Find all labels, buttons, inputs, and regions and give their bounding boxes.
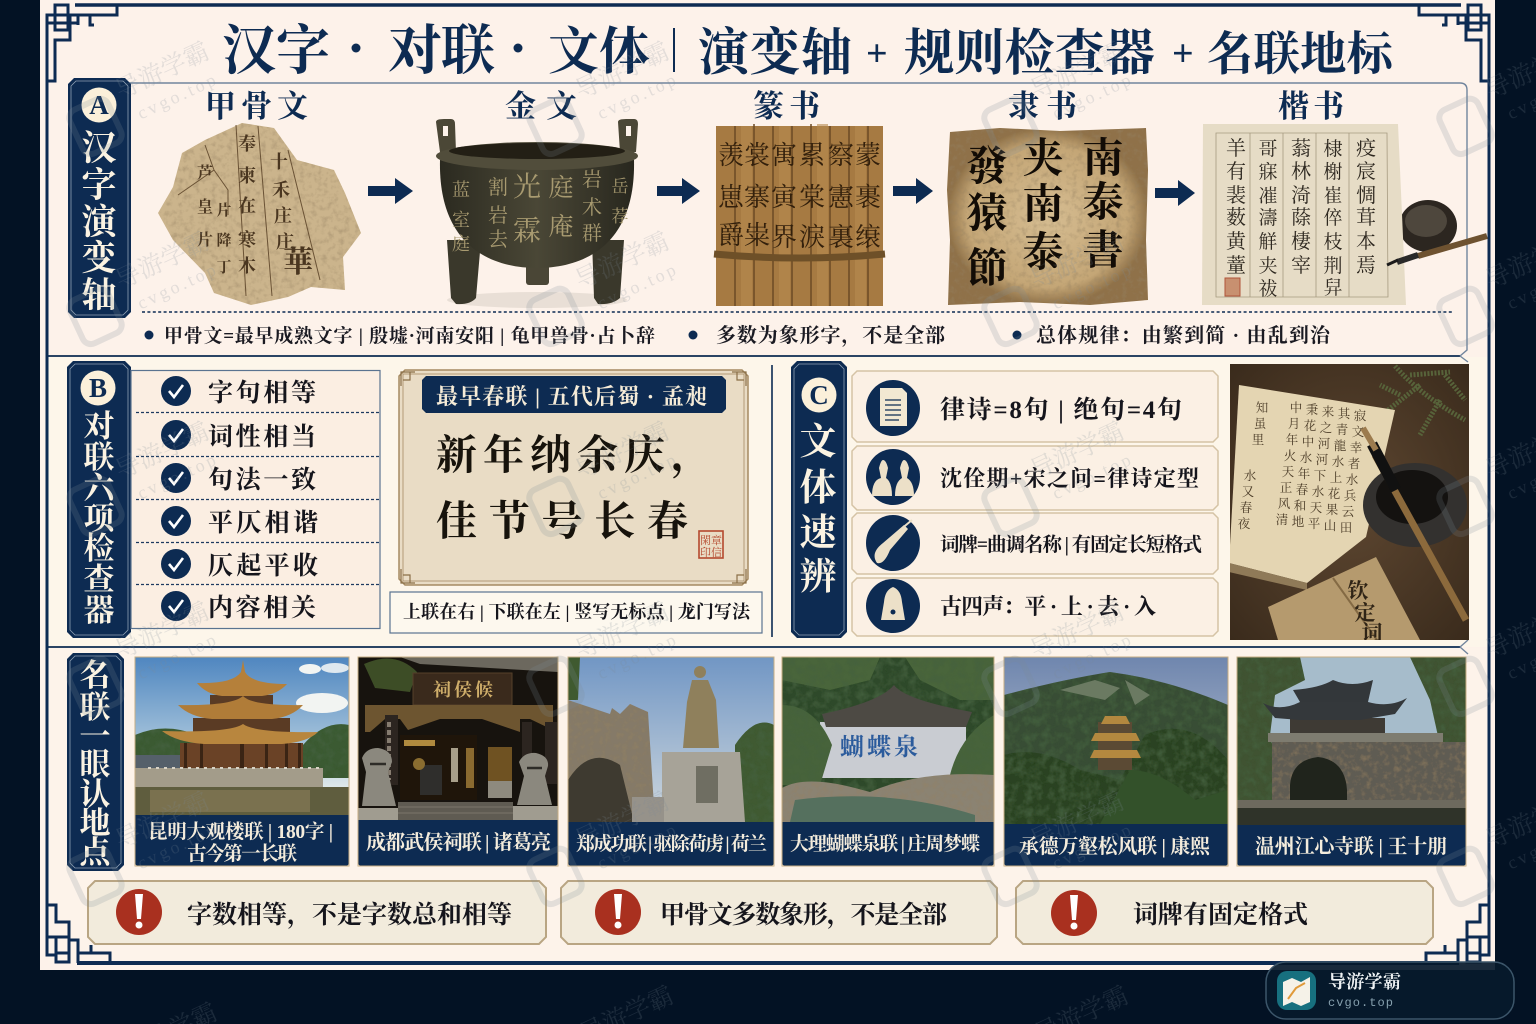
checklist: 词性相当: [208, 422, 316, 451]
image: bamboo slips: 累棠淚: [799, 141, 825, 252]
row: 沈宋: 沈佺期+宋之问=律诗定型: [940, 466, 1199, 491]
image: regular script paper: 哥寐凗濤觧夹祓: [1258, 138, 1278, 300]
checklist: 仄起平收: [208, 552, 318, 580]
image: bamboo slips: 寓寅界: [771, 141, 799, 252]
watermarks: cvgo.top: [1049, 820, 1134, 873]
photo: book and inkstone: 中月年火天正风清: [1276, 400, 1302, 527]
photo: book and inkstone: 来之河河下水天平: [1308, 404, 1335, 531]
stage headings: [205, 89, 1345, 124]
couplet card: [399, 370, 748, 585]
card: 温州江心寺: 温州江心寺联 | 王十朋: [1255, 835, 1447, 858]
stage headings: 隶书: [1008, 89, 1078, 124]
panel: landmark couplets: [67, 653, 1466, 871]
key points line: [144, 324, 1332, 347]
photo: book and inkstone: 钦定词: [1348, 579, 1382, 645]
card: 成都武侯祠: 成都武侯祠联 | 诸葛亮: [366, 830, 551, 854]
label: B 对联六项检查器: 对联六项检查器: [84, 409, 118, 628]
stage headings: 篆书: [753, 89, 821, 124]
brand badge: 导游学霸: [1328, 972, 1401, 992]
watermarks: 导游学霸: [111, 227, 214, 295]
warning 2: [561, 881, 997, 944]
brand badge: cvgo.top: [1328, 996, 1393, 1010]
title: 名联地标: [1207, 29, 1396, 81]
image: bronze ding: 蓝室庭: [452, 180, 470, 254]
title: +: [1172, 33, 1194, 75]
image: regular script paper: [1202, 124, 1487, 305]
image: regular script paper: 疫宸惆茸本焉: [1356, 137, 1376, 277]
key points line: 甲骨文=最早成熟文字 | 殷墟·河南安阳 | 龟甲兽骨·占卜辞: [164, 324, 655, 347]
image: oracle bone: 十禾庄庄: [270, 152, 294, 252]
row: 词牌: 词牌=曲调名称 | 有固定长短格式: [940, 534, 1202, 556]
card: 昆明大观楼: [135, 657, 349, 866]
image: bamboo slips: 羡崽爵: [718, 141, 745, 250]
checklist: 内容相关: [208, 593, 316, 622]
card: 昆明大观楼: 昆明大观楼联 | 180字 |: [148, 821, 333, 843]
card: 承德万壑松风: [1004, 657, 1228, 866]
title: +: [866, 33, 888, 75]
arrow: [893, 178, 933, 204]
image: regular script paper: 蓊林渏蒢棲宰: [1291, 137, 1312, 277]
stage headings: 甲骨文: [205, 89, 308, 124]
image: clerical parchment: 夹南泰: [1022, 135, 1064, 275]
panel: C genre quick guide: [791, 361, 1469, 645]
watermarks: 导游学霸: [571, 787, 674, 855]
couplet card: 最早春联 | 五代后蜀 · 孟昶: [436, 384, 707, 409]
watermarks: 导游学霸: [1026, 597, 1129, 665]
label: C 文体速辨: C: [809, 380, 829, 410]
checklist: 平仄相谐: [208, 508, 318, 537]
image: bronze ding: 庭庵: [548, 174, 574, 241]
image: oracle bone: 奉柬在寒木: [238, 134, 256, 276]
checklist: [131, 370, 380, 628]
label: B 对联六项检查器: B: [89, 373, 107, 403]
card: 温州江心寺: [1237, 657, 1466, 866]
photo: book and inkstone: 知虽里水又春夜: [1238, 401, 1268, 531]
image: bamboo slips: 蒙裹缞: [855, 141, 881, 252]
watermarks: cvgo.top: [134, 820, 219, 873]
watermarks: 导游学霸: [1026, 227, 1129, 295]
rule strip: [390, 592, 762, 633]
card: 郑成功: [568, 657, 774, 866]
watermarks: cvgo.top: [1049, 260, 1134, 313]
watermarks: cvgo.top: [134, 260, 219, 313]
image: regular script paper: 羊有裴薮黄蕫: [1226, 137, 1247, 277]
watermarks: cvgo.top: [134, 450, 219, 503]
dotted separator: [142, 311, 1452, 313]
couplet card: 印信: [700, 545, 722, 559]
image: bronze ding: 岳荐: [612, 177, 628, 226]
watermarks: cvgo.top: [594, 820, 679, 873]
row: 四声: [852, 578, 1218, 636]
card: 大理蝴蝶泉: 大理蝴蝶泉联 | 庄周梦蝶: [790, 832, 980, 855]
image: clerical parchment: [947, 128, 1148, 305]
label: A 汉字演变轴: 汉字演变轴: [81, 129, 121, 315]
label: 名联一眼认地点: 名联一眼认地点: [80, 658, 112, 870]
checklist: 句法一致: [208, 466, 316, 494]
image: oracle bone: 片降丁: [216, 201, 232, 276]
image: clerical parchment: 發猿節: [966, 143, 1008, 291]
warning 3: [1016, 881, 1433, 944]
photo: book and inkstone: [1229, 364, 1469, 645]
label: A 汉字演变轴: A: [89, 90, 109, 120]
card: 大理蝴蝶泉: [782, 657, 994, 866]
photo: book and inkstone: 寂文幸者水兵云田: [1340, 408, 1367, 535]
image: bamboo slips: [714, 124, 885, 306]
couplet card: 新年纳余庆，: [436, 432, 712, 479]
card: 成都武侯祠: [358, 657, 558, 866]
brand badge: [1266, 962, 1514, 1019]
watermarks: 导游学霸: [571, 417, 674, 485]
watermarks: cvgo.top: [594, 630, 679, 683]
key points line: 总体规律：由繁到简 · 由乱到治: [1036, 324, 1332, 347]
image: oracle bone: 華: [283, 246, 313, 279]
watermarks: cvgo.top: [1049, 70, 1134, 123]
watermarks: cvgo.top: [594, 70, 679, 123]
title: 对联: [388, 21, 495, 81]
label: C 文体速辨: 文体速辨: [800, 421, 838, 598]
label: 名联一眼认地点: [67, 653, 124, 871]
image: regular script paper: 棣榭崔倅枝荆舁: [1323, 138, 1343, 299]
card: 大理蝴蝶泉: 蝴蝶泉: [840, 734, 918, 761]
warning 2: 甲骨文多数象形，不是全部: [660, 901, 947, 930]
watermarks: 导游学霸: [571, 597, 674, 665]
watermarks: cvgo.top: [134, 630, 219, 683]
watermarks: 导游学霸: [571, 227, 674, 295]
row: 沈宋: [852, 446, 1218, 510]
row: 律诗: [852, 371, 1218, 442]
panel: B couplet checker: [67, 361, 762, 638]
warning 1: [88, 881, 546, 944]
label: C 文体速辨: [791, 361, 847, 638]
title: 规则检查器: [904, 25, 1155, 81]
watermarks: 导游学霸: [111, 417, 214, 485]
image: bamboo slips: 察憲裏: [828, 141, 855, 252]
image: oracle bone: [158, 123, 361, 305]
watermarks: cvgo.top: [594, 260, 679, 313]
watermarks: 导游学霸: [111, 37, 214, 105]
image: bronze ding: [436, 119, 638, 308]
warning 1: 字数相等，不是字数总和相等: [187, 900, 512, 930]
watermarks: 导游学霸: [111, 597, 214, 665]
couplet card: 佳节号长春: [436, 498, 688, 544]
key points line: 多数为象形字，不是全部: [716, 324, 945, 347]
image: bronze ding: 光霖: [513, 171, 541, 247]
rule strip: 上联在右 | 下联在左 | 竖写无标点 | 龙门写法: [403, 601, 752, 622]
image: bronze ding: 割岩去: [488, 176, 508, 251]
warning 3: 词牌有固定格式: [1133, 900, 1308, 929]
image: bronze ding: 岩术群: [582, 168, 602, 245]
watermarks: cvgo.top: [1049, 450, 1134, 503]
watermarks: 导游学霸: [1026, 787, 1129, 855]
label: A 汉字演变轴: [68, 78, 131, 318]
watermarks: cvgo.top: [1049, 630, 1134, 683]
stage headings: 楷书: [1278, 89, 1345, 124]
row: 四声: 古四声：平 · 上 · 去 · 入: [940, 594, 1156, 619]
title: [222, 21, 1396, 82]
watermarks: 导游学霸: [111, 787, 214, 855]
title: 汉字: [222, 21, 330, 81]
arrow: [368, 178, 413, 204]
watermarks: cvgo.top: [134, 70, 219, 123]
photo: book and inkstone: 秉花中水年春和地: [1292, 402, 1319, 529]
card: 昆明大观楼: 古今第一长联: [187, 842, 297, 865]
card: 承德万壑松风: 承德万壑松风联 | 康熙: [1019, 834, 1212, 858]
card: 成都武侯祠: 祠侯候: [433, 680, 493, 700]
title: 演变轴: [698, 25, 852, 82]
card: 郑成功: 郑成功联 | 驱除荷虏 | 荷兰: [576, 833, 767, 855]
arrow: [1155, 180, 1195, 206]
arrow: [657, 178, 700, 204]
watermarks: 导游学霸: [1026, 417, 1129, 485]
divider: [771, 365, 773, 637]
panel: A evolution axis: [68, 78, 1487, 347]
checklist: 字句相等: [208, 378, 316, 407]
image: clerical parchment: 南泰書: [1082, 135, 1124, 273]
image: bamboo slips: 裳寨粜: [744, 141, 770, 250]
row: 词牌: [852, 513, 1218, 574]
watermarks: 导游学霸: [1026, 37, 1129, 105]
photo: book and inkstone: 其青龍水上花果山: [1324, 406, 1351, 533]
title: 文体: [548, 25, 650, 81]
label: B 对联六项检查器: [67, 361, 131, 638]
watermarks: 导游学霸: [571, 37, 674, 105]
stage headings: 金文: [505, 89, 577, 124]
watermarks: cvgo.top: [594, 450, 679, 503]
row: 律诗: 律诗=8句 | 绝句=4句: [940, 395, 1182, 424]
couplet card: 閑章: [700, 533, 722, 547]
image: oracle bone: 芦皇片: [197, 163, 213, 249]
